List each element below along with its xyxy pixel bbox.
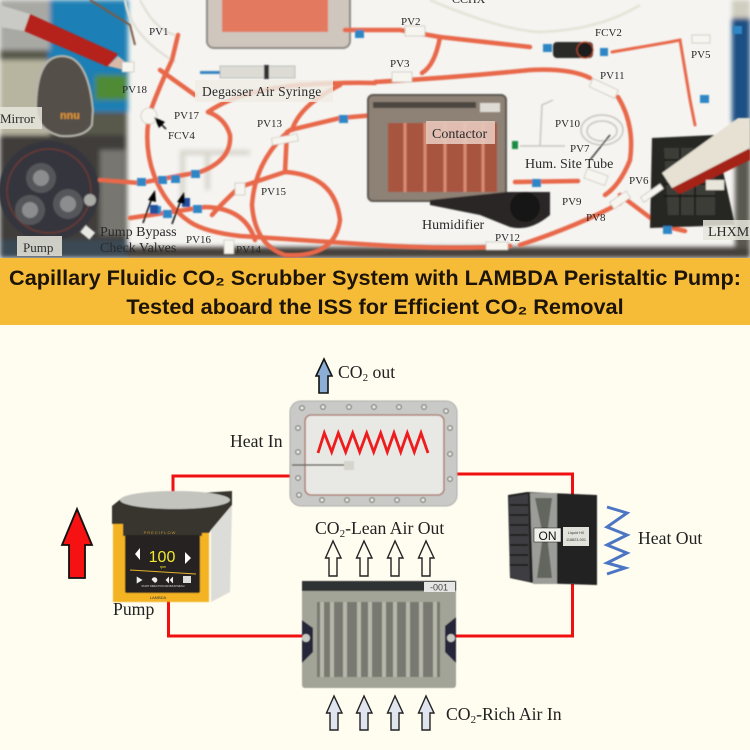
photo labels: Pump Bypass (100, 225, 177, 240)
label: CO2-Lean Air Out: 2 (340, 528, 345, 540)
photo labels: PV18 (122, 84, 148, 96)
photo labels: PV1 (149, 26, 169, 38)
title banner: Capillary Fluidic CO₂ Scrubber System with LAMBDA Peristaltic Pump: (9, 265, 741, 290)
component: liquid heat exchanger: ON (538, 529, 556, 543)
label: CO2-Lean Air Out: -Lean Air Out (345, 518, 444, 538)
label: CO2 out: 2 (363, 372, 368, 384)
photo labels: PV17 (174, 110, 200, 122)
component: LAMBDA pump: 100 (149, 549, 175, 566)
panel: ISS hardware photo (0, 0, 750, 258)
photo labels: Contactor (432, 127, 488, 142)
component: liquid heat exchanger: Liquid HX (568, 531, 585, 535)
humidifier fan (430, 192, 550, 228)
hum site tube (520, 100, 623, 146)
label: CO2 out: CO (338, 362, 363, 382)
photo labels: PV16 (186, 234, 212, 246)
display unit (36, 56, 93, 136)
title banner: Tested aboard the ISS for Efficient CO₂ Removal (126, 294, 624, 319)
photo labels: PV15 (261, 186, 287, 198)
arrows: rich air in (326, 696, 434, 730)
heat-out blue zigzag (607, 507, 627, 574)
photo labels: PV13 (257, 118, 283, 130)
top contactor with orange core (207, 0, 350, 48)
component: LAMBDA pump: rpm (160, 565, 166, 569)
component: LAMBDA pump: START DIRECTION MAXIMUM MENU (141, 585, 185, 588)
pump rotor (0, 141, 99, 241)
label: CO2-Rich Air In: -Rich Air In (476, 704, 562, 724)
black flow control valve (553, 42, 593, 58)
heat zigzag (318, 433, 428, 453)
photo labels: PV14 (236, 244, 262, 256)
component: LAMBDA pump: LAMBDA (150, 595, 167, 600)
photo labels: Degasser Air Syringe (202, 84, 321, 99)
component: contactor module: -001 (430, 582, 448, 592)
label: Heat In: Heat In (230, 431, 283, 451)
photo labels: PV8 (586, 212, 606, 224)
arrows: lean air out (326, 541, 434, 576)
large syringe left (24, 14, 118, 67)
photo labels: PV7 (570, 143, 590, 155)
pale and brown tubes (125, 0, 175, 62)
degasser syringe (220, 66, 295, 78)
component: liquid heat exchanger: 118823-001 (566, 538, 586, 542)
photo labels: FCV2 (595, 27, 622, 39)
photo labels: LHXM (708, 225, 750, 240)
LHXM unit (650, 135, 735, 228)
blue connectors (137, 26, 742, 234)
label: Pump: Pump (113, 599, 154, 619)
arrow: CO2 out (316, 359, 332, 393)
component: LAMBDA pump (112, 491, 232, 602)
component: contactor module (302, 581, 456, 688)
label: Heat Out: Heat Out (638, 528, 702, 548)
component: heat-in exchanger (290, 401, 457, 506)
component: LAMBDA pump: PRECIFLOW (144, 530, 176, 535)
photo labels: PV5 (691, 49, 711, 61)
photo labels (0, 0, 750, 256)
photo labels: Mirror (0, 111, 35, 126)
photo labels: PV11 (600, 70, 625, 82)
label: CO2-Lean Air Out: CO (315, 518, 340, 538)
photo labels: PV3 (390, 58, 410, 70)
photo labels: FCV4 (168, 130, 195, 142)
orange tubing network (100, 30, 695, 255)
red flow loop (168, 474, 572, 636)
photo labels: Pump (23, 240, 53, 255)
photo labels: PV10 (555, 118, 581, 130)
photo labels: Check Valves (100, 241, 176, 256)
photo labels: PV2 (401, 16, 421, 28)
component: liquid heat exchanger (508, 492, 597, 585)
photo labels: PV6 (629, 175, 649, 187)
label: CO2 out: out (368, 362, 395, 382)
photo labels: Humidifier (422, 218, 485, 233)
black pointer arrows (143, 119, 182, 224)
white clips (122, 26, 710, 254)
title banner (0, 258, 750, 325)
photo labels: PV12 (495, 232, 520, 244)
photo labels: Hum. Site Tube (525, 157, 613, 172)
label: CO2-Rich Air In: 2 (471, 714, 476, 726)
big contactor (368, 95, 506, 201)
arrow: red flow direction (62, 509, 92, 578)
photo labels: PV9 (562, 196, 582, 208)
panel: ISS hardware photo: nnu (60, 111, 80, 123)
label: CO2-Rich Air In: CO (446, 704, 471, 724)
